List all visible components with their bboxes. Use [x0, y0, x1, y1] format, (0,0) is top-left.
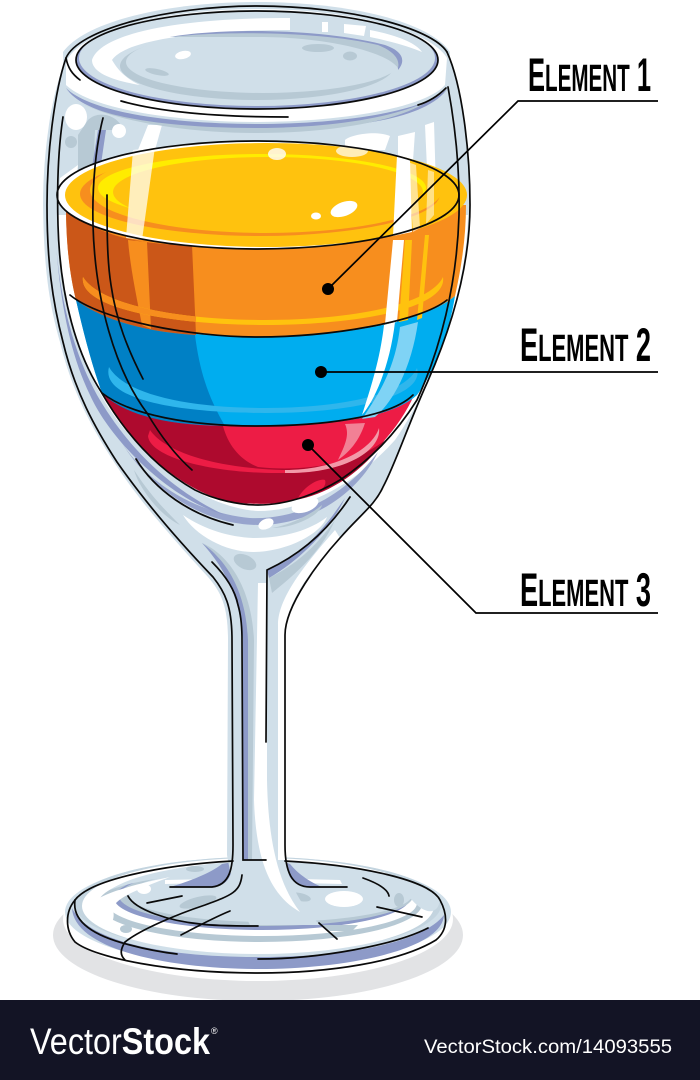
glass foot [63, 857, 453, 981]
callout: element 2 [315, 318, 658, 378]
base shadow [53, 869, 463, 1001]
callout: element 3: ELEMENT 3 [520, 563, 651, 616]
liquid layer: red [102, 393, 414, 504]
glass outlines [47, 6, 470, 973]
callout: element 1: ELEMENT 1 [528, 48, 651, 101]
footer banner: VectorStock [30, 1021, 210, 1062]
callout: element 1 [322, 48, 658, 295]
liquid surface: yellow top [57, 141, 467, 249]
footer banner: VectorStock.com/14093555 [424, 1037, 672, 1058]
liquid layer: blue [76, 296, 455, 426]
liquid layer: orange [66, 205, 466, 337]
footer banner: ® [211, 1026, 218, 1036]
glass rim [63, 2, 450, 133]
footer banner [0, 1000, 700, 1080]
glass stem and bowl [43, 52, 470, 925]
callout: element 3 [302, 439, 658, 616]
callout: element 2: ELEMENT 2 [520, 318, 651, 371]
